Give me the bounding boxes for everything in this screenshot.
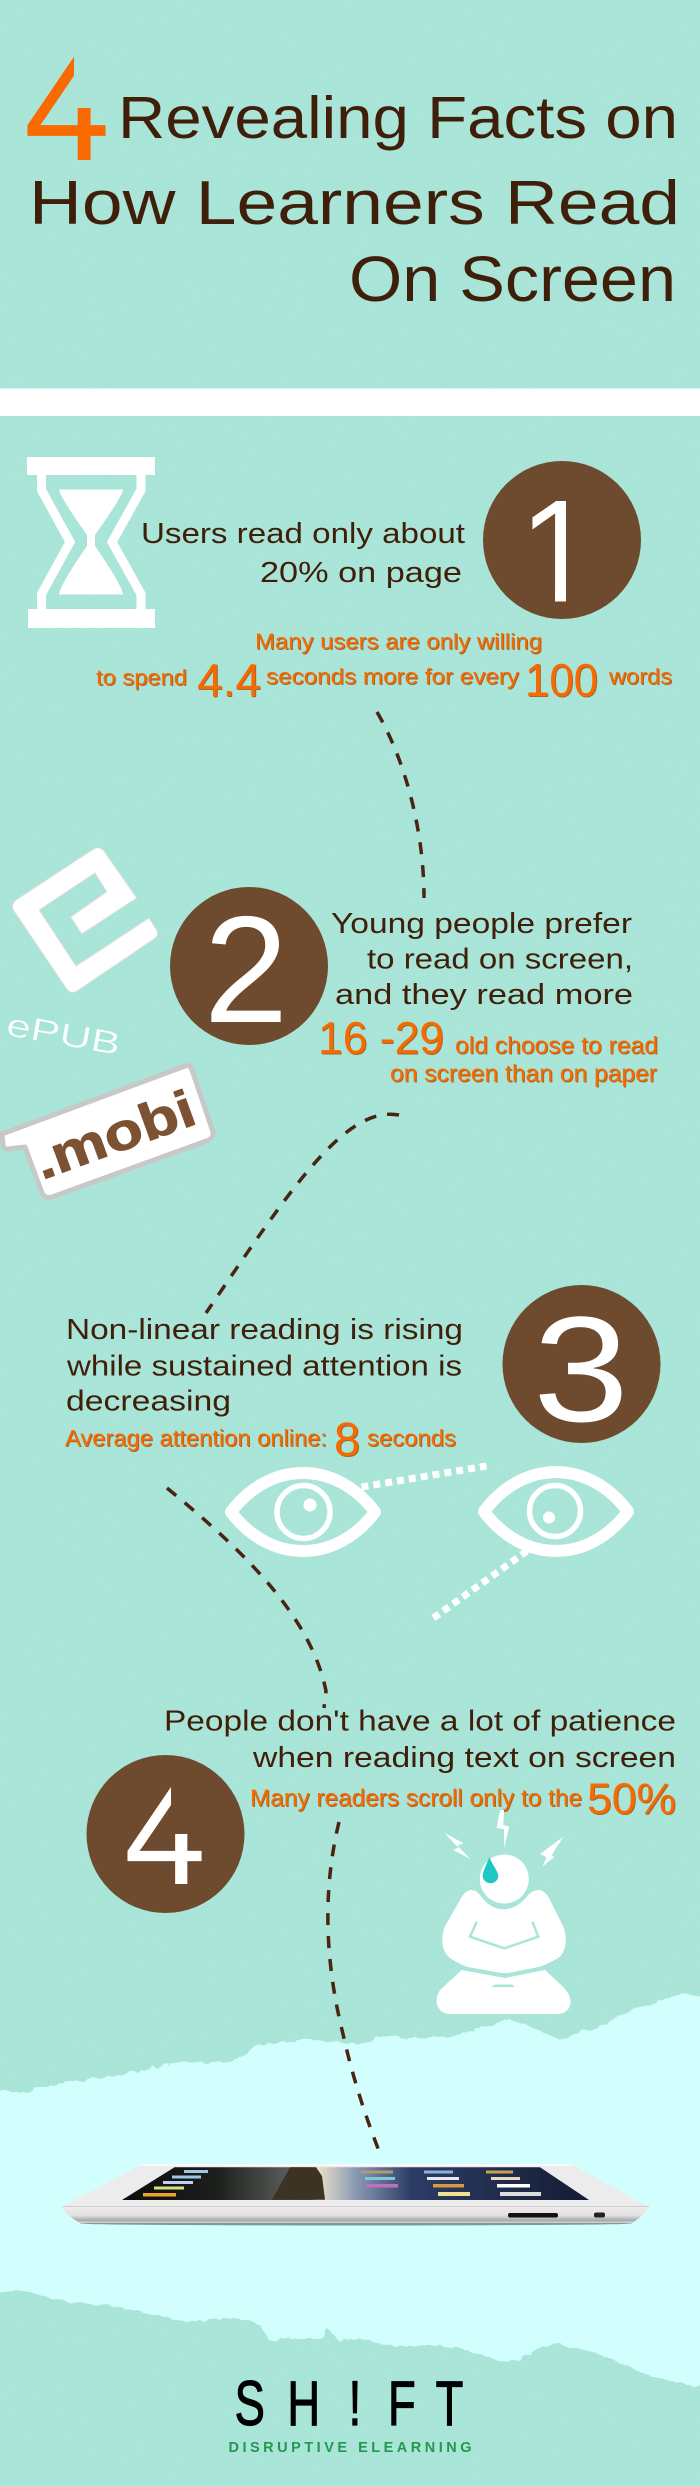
arrow: dashed path 1 to 2 (377, 712, 424, 898)
number circle 1: 1 (518, 470, 600, 632)
fact 4 heading (164, 1706, 676, 1774)
fact 2 statistic: on screen than on paper (390, 1060, 657, 1088)
fact 3 heading (66, 1314, 463, 1418)
title line 1: Revealing Facts on (118, 85, 678, 151)
fact 1 statistic: words (608, 664, 672, 689)
fact 4 statistic (250, 1774, 676, 1824)
number circle 1 (483, 461, 641, 632)
fact 1 statistic: Many users are only willing (255, 629, 542, 654)
number circle 4 (86, 1752, 244, 1916)
number circle 4: 4 (124, 1752, 206, 1916)
fact 2 statistic: 16 -29 (318, 1012, 444, 1064)
dotted gaze line upper (362, 1466, 486, 1487)
panel: fact 4 (86, 1706, 676, 2014)
number circle 3: 3 (533, 1285, 629, 1453)
number circle 3 (502, 1285, 660, 1453)
fact 1 statistic (96, 629, 672, 706)
torn light paper band (0, 1994, 700, 2385)
fact 1 statistic: 100 (525, 654, 598, 706)
arrow: dashed path 2 to 3 (206, 1114, 399, 1313)
fact 2 heading: to read on screen, (367, 944, 633, 976)
panel: fact 3 (65, 1285, 660, 1619)
panel: fact 2 (2, 848, 658, 1198)
fact 3 statistic: Average attention online: (65, 1425, 327, 1451)
fact 2 statistic (318, 1012, 658, 1088)
logo tagline: DISRUPTIVE ELEARNING (228, 2440, 472, 2456)
arrow: dashed path 4 to tablet (328, 1822, 379, 2151)
fact 1 heading: Users read only about (141, 518, 465, 550)
arrow: dashed path 3 to 4 (167, 1488, 326, 1708)
fact 1 heading: 20% on page (260, 557, 462, 589)
fact 4 heading: when reading text on screen (252, 1742, 676, 1774)
fact 4 statistic: 50% (587, 1774, 676, 1824)
icon: stressed meditating reader (436, 1810, 571, 2014)
icon: mobi tag (2, 1066, 213, 1198)
title numeral 4: 4 (24, 20, 110, 193)
white divider band (0, 388, 700, 416)
title (27, 56, 676, 302)
tablet screen (122, 2167, 589, 2200)
tablet switch (594, 2212, 605, 2218)
icon: left eye (231, 1473, 375, 1551)
fact 3 heading: while sustained attention is (66, 1350, 462, 1382)
title line 3: On Screen (349, 243, 676, 315)
fact 3 statistic: seconds (367, 1425, 456, 1451)
icon: ePUB logo: ePUB (4, 1006, 123, 1062)
icon: hourglass (27, 457, 155, 628)
fact 1 statistic: 4.4 (197, 654, 261, 706)
fact 3 statistic (65, 1412, 456, 1466)
fact 1 statistic: to spend (96, 665, 187, 690)
fact 4 statistic: Many readers scroll only to the (250, 1785, 582, 1812)
number circle 2 (170, 885, 328, 1055)
logo: SHIFT: SH!FT (235, 2368, 463, 2439)
icon: tablet (62, 2164, 649, 2226)
dotted gaze line lower (432, 1551, 527, 1619)
icon: ePUB logo (4, 848, 158, 1062)
fact 1 heading (141, 518, 465, 589)
fact 2 heading: and they read more (335, 979, 633, 1011)
tablet volume button (508, 2213, 558, 2218)
icon: mobi tag: .mobi (26, 1080, 203, 1191)
title line 2: How Learners Read (29, 169, 680, 238)
fact 3 heading: Non-linear reading is rising (66, 1314, 463, 1346)
fact 3 statistic: 8 (334, 1412, 360, 1466)
number circle 2: 2 (204, 885, 288, 1055)
panel: fact 1 (27, 457, 672, 706)
fact 2 statistic: old choose to read (455, 1032, 658, 1060)
fact 2 heading (331, 908, 633, 1011)
fact 1 statistic: seconds more for every (266, 664, 519, 689)
fact 3 heading: decreasing (66, 1386, 231, 1418)
fact 2 heading: Young people prefer (331, 908, 632, 940)
fact 4 heading: People don't have a lot of patience (164, 1706, 676, 1738)
icon: right eye (484, 1472, 628, 1551)
